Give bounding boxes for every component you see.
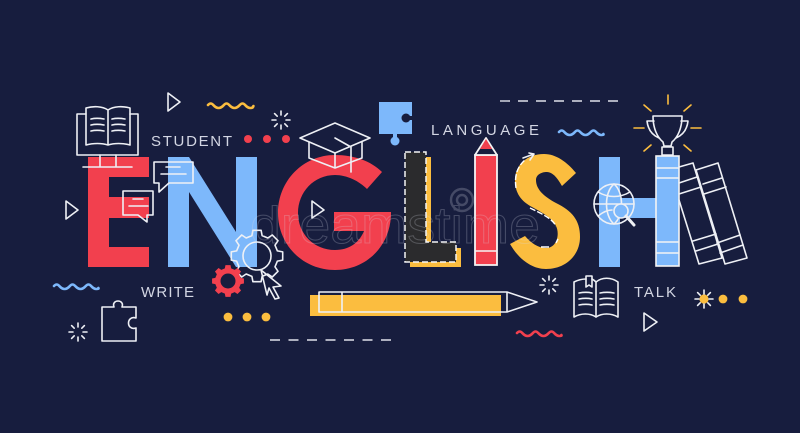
H right stem: book spine (656, 156, 679, 266)
icon: play triangle right (644, 313, 657, 331)
icon: white puzzle piece (102, 301, 136, 341)
icon: play triangle top (168, 93, 180, 111)
icon: play triangle left (66, 201, 78, 219)
icon: trophy (634, 95, 701, 155)
letter S (510, 153, 580, 269)
sparkle centre (540, 276, 558, 294)
yellow dots left (224, 313, 270, 321)
sparkle left (69, 323, 87, 341)
label: language: LANGUAGE (431, 122, 539, 139)
letter L (405, 152, 461, 267)
label: talk: TALK (634, 284, 676, 301)
icon: red gear (212, 265, 244, 297)
dashed line top (500, 100, 621, 102)
icon: open book with bookmark (574, 276, 618, 317)
blue squiggle top (559, 130, 604, 135)
watermark: dreamstime (250, 197, 540, 255)
icon: blue puzzle piece (379, 102, 412, 146)
big pencil (310, 292, 537, 316)
letter I: pencil (475, 138, 497, 265)
label: student: STUDENT (151, 133, 232, 150)
yellow squiggle (208, 104, 253, 108)
icon: speech bubble lower (123, 191, 153, 222)
blue squiggle left (54, 284, 99, 289)
letter G (278, 155, 391, 270)
red squiggle (517, 332, 562, 336)
icon: speech bubble upper (154, 162, 193, 192)
red dots (244, 135, 290, 143)
icon: graduation cap (300, 123, 370, 172)
letter N (168, 157, 257, 267)
icon: open book on stand (77, 107, 138, 167)
icon: globe with magnifier (594, 184, 634, 225)
letter E (88, 157, 149, 267)
icon: sun and dots (695, 290, 747, 308)
icon: leaning books (679, 163, 747, 264)
icon: badge cog (231, 230, 283, 282)
dashed line bottom (270, 339, 392, 341)
label: write: WRITE (141, 284, 194, 301)
sparkle top (272, 111, 290, 129)
icon: play triangle in G (312, 201, 324, 218)
icon: cursor arrow (261, 270, 281, 299)
letter H (599, 157, 656, 267)
